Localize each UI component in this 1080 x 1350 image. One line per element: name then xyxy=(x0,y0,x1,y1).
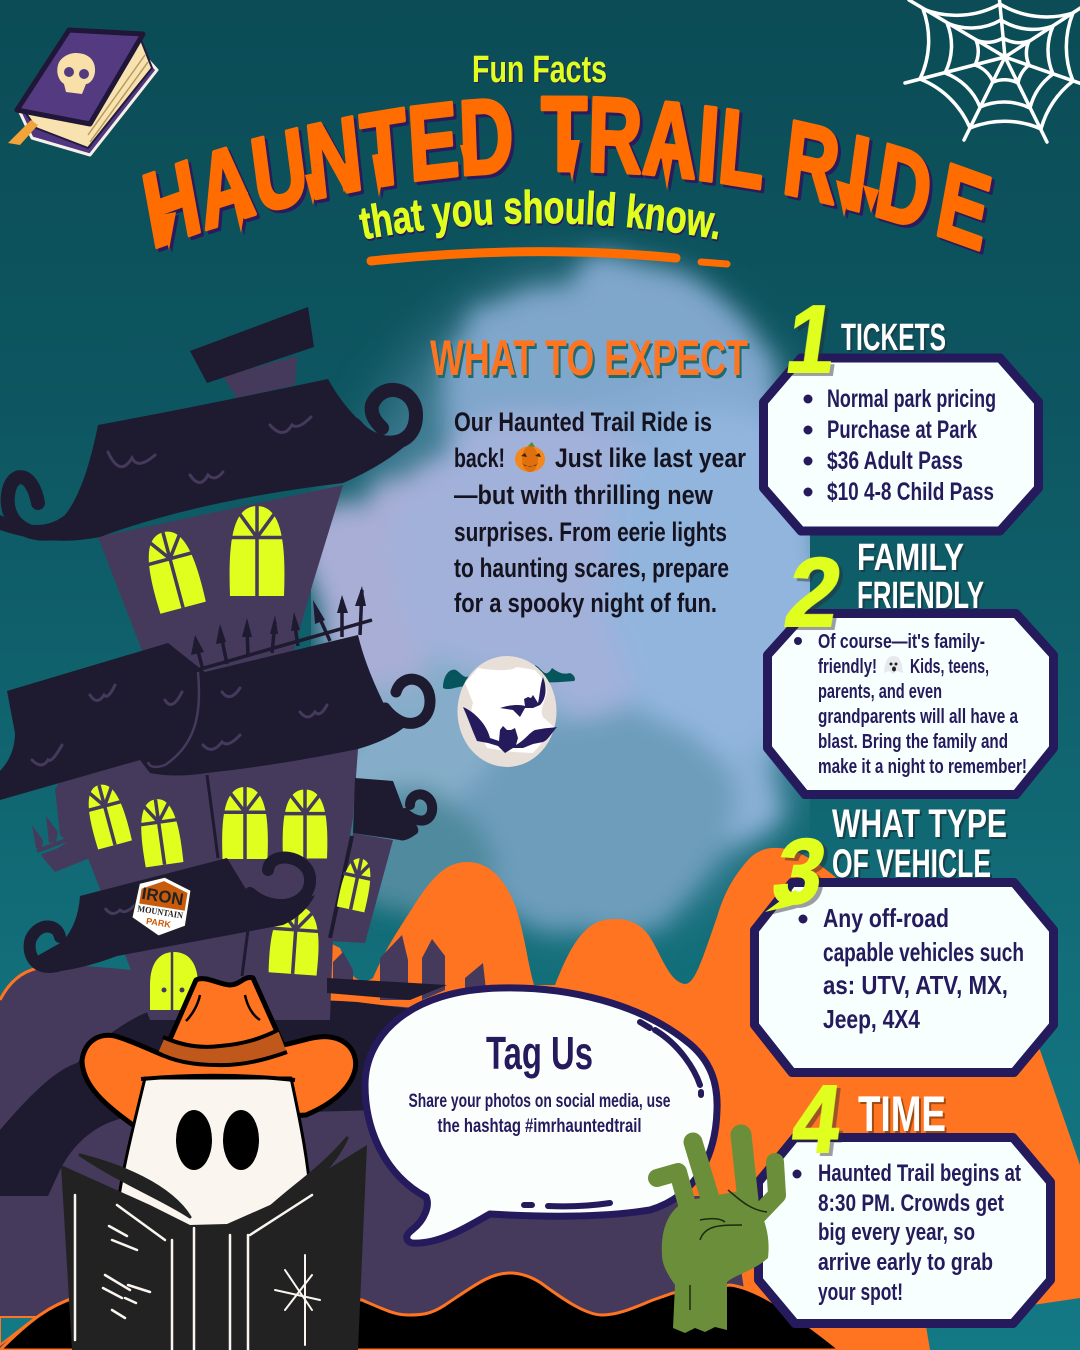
intro paragraph: —but with thrilling new xyxy=(454,480,714,510)
bullet list: $36 Adult Pass xyxy=(827,447,963,475)
middle roof xyxy=(0,635,430,800)
bullet list: Normal park pricing xyxy=(827,385,996,413)
book details xyxy=(75,1195,320,1350)
side tower xyxy=(328,833,393,943)
title drips xyxy=(160,140,879,250)
paragraph: Of course—it's family- xyxy=(818,631,985,653)
book page flaps xyxy=(80,1138,347,1217)
upper windows xyxy=(139,506,285,614)
moon with bats xyxy=(443,656,575,767)
open book xyxy=(61,1145,367,1350)
step 3: vehicle xyxy=(754,802,1054,1072)
bullet list: Purchase at Park xyxy=(827,416,977,444)
number: 2 xyxy=(778,538,850,647)
subtitle: that you should know. xyxy=(358,189,720,242)
chimney xyxy=(190,307,314,398)
title: haunted trail ride: TRAIL xyxy=(540,96,766,194)
paragraph: blast. Bring the family and xyxy=(818,731,1008,753)
hat xyxy=(82,977,356,1125)
paragraph: 8:30 PM. Crowds get xyxy=(818,1190,1004,1217)
heading: Tag Us xyxy=(486,1027,593,1079)
tower body xyxy=(55,485,358,1020)
bullet list: $10 4-8 Child Pass xyxy=(827,478,994,506)
haunted house xyxy=(0,307,432,1020)
paragraph: as: UTV, ATV, MX, xyxy=(823,970,1008,1000)
orange hills xyxy=(317,848,1080,1350)
paragraph xyxy=(792,1160,1021,1306)
fence rail and pickets xyxy=(327,935,486,1000)
card xyxy=(768,614,1054,794)
paragraph: Jeep, 4X4 xyxy=(823,1004,920,1034)
iron mountain logo: IRON xyxy=(140,884,185,909)
heading xyxy=(857,537,984,617)
intro paragraph: Our Haunted Trail Ride is xyxy=(454,407,712,437)
paragraph: Haunted Trail begins at xyxy=(818,1160,1021,1187)
bullet list xyxy=(804,385,996,506)
heading xyxy=(832,802,1007,886)
speech bubble: tag us xyxy=(365,988,717,1243)
number: 4 xyxy=(787,1066,847,1173)
intro paragraph: to haunting scares, prepare xyxy=(454,553,729,583)
paragraph: big every year, so xyxy=(818,1219,975,1246)
paragraph: arrive early to grab xyxy=(818,1249,993,1276)
paragraph: Any off-road xyxy=(823,903,949,933)
card xyxy=(754,882,1054,1072)
lower roof xyxy=(30,858,315,972)
dark arch xyxy=(0,1000,420,1196)
paragraph: grandparents will all have a xyxy=(818,706,1019,728)
heading: FRIENDLY xyxy=(857,575,984,617)
icon: pumpkin xyxy=(515,442,545,472)
icon: skull book xyxy=(8,30,157,155)
heading: fun facts: Fun Facts xyxy=(472,49,607,91)
intro paragraph: back! xyxy=(454,443,505,473)
card xyxy=(764,358,1038,531)
lower window xyxy=(268,904,322,976)
ghost body xyxy=(117,1078,311,1240)
card xyxy=(758,1138,1050,1324)
black ground wave xyxy=(0,1273,840,1350)
eyes xyxy=(176,1110,259,1170)
paragraph: friendly! xyxy=(818,656,877,678)
small bat xyxy=(500,677,546,717)
paragraph xyxy=(794,631,1027,778)
bubble highlight xyxy=(524,1022,701,1206)
heading: what to expect: WHAT TO EXPECT xyxy=(430,330,748,386)
smoke cloud xyxy=(310,265,840,935)
spider web xyxy=(905,0,1080,142)
top roof xyxy=(0,379,416,541)
side window xyxy=(336,856,376,912)
intro paragraph xyxy=(454,407,746,618)
large bat xyxy=(463,707,557,753)
icon: ghost xyxy=(884,656,903,674)
moon xyxy=(458,656,556,767)
bottom tower line xyxy=(242,930,248,976)
heading: OF VEHICLE xyxy=(832,842,991,886)
ghost cowboy reading xyxy=(61,977,367,1350)
balcony xyxy=(32,812,95,872)
number: 1 xyxy=(780,286,843,393)
intro paragraph: surprises. From eerie lights xyxy=(454,517,727,547)
iron spike fence xyxy=(191,586,372,670)
title: haunted trail ride xyxy=(142,96,995,255)
door window xyxy=(150,952,198,1010)
body text: Share your photos on social media, use xyxy=(408,1091,670,1112)
heading: TIME xyxy=(858,1086,946,1142)
hat brim line xyxy=(141,1076,295,1080)
step 1: tickets xyxy=(764,286,1038,531)
body text xyxy=(408,1091,670,1137)
paragraph xyxy=(798,903,1024,1034)
heading: WHAT TYPE xyxy=(832,802,1007,846)
step 2: family friendly xyxy=(768,537,1054,794)
underline xyxy=(371,252,727,264)
side roof xyxy=(330,778,432,938)
heading: FAMILY xyxy=(857,537,964,579)
middle windows xyxy=(81,775,328,867)
heading: TICKETS xyxy=(841,317,946,359)
iron mountain logo: PARK xyxy=(145,916,172,930)
paragraph: Kids, teens, xyxy=(910,656,989,678)
number: 3 xyxy=(765,820,835,923)
step 4: time xyxy=(758,1066,1050,1324)
iron mountain logo: MOUNTAIN xyxy=(137,903,184,921)
iron mountain logo xyxy=(130,873,192,940)
purple dome and floor xyxy=(0,966,745,1350)
body text: the hashtag #imrhauntedtrail xyxy=(438,1116,642,1137)
number tail xyxy=(765,890,812,912)
title: haunted trail ride: RIDE xyxy=(784,119,995,255)
title: haunted trail ride: HAUNTED xyxy=(142,98,514,252)
dome outline xyxy=(0,968,38,1000)
teal corner xyxy=(0,1317,36,1345)
paragraph: your spot! xyxy=(818,1279,903,1306)
zombie hand xyxy=(657,1135,777,1333)
intro paragraph: for a spooky night of fun. xyxy=(454,588,717,618)
intro paragraph: Just like last year xyxy=(555,443,746,473)
bat wings behind moon xyxy=(443,665,575,689)
paragraph: parents, and even xyxy=(818,681,942,703)
